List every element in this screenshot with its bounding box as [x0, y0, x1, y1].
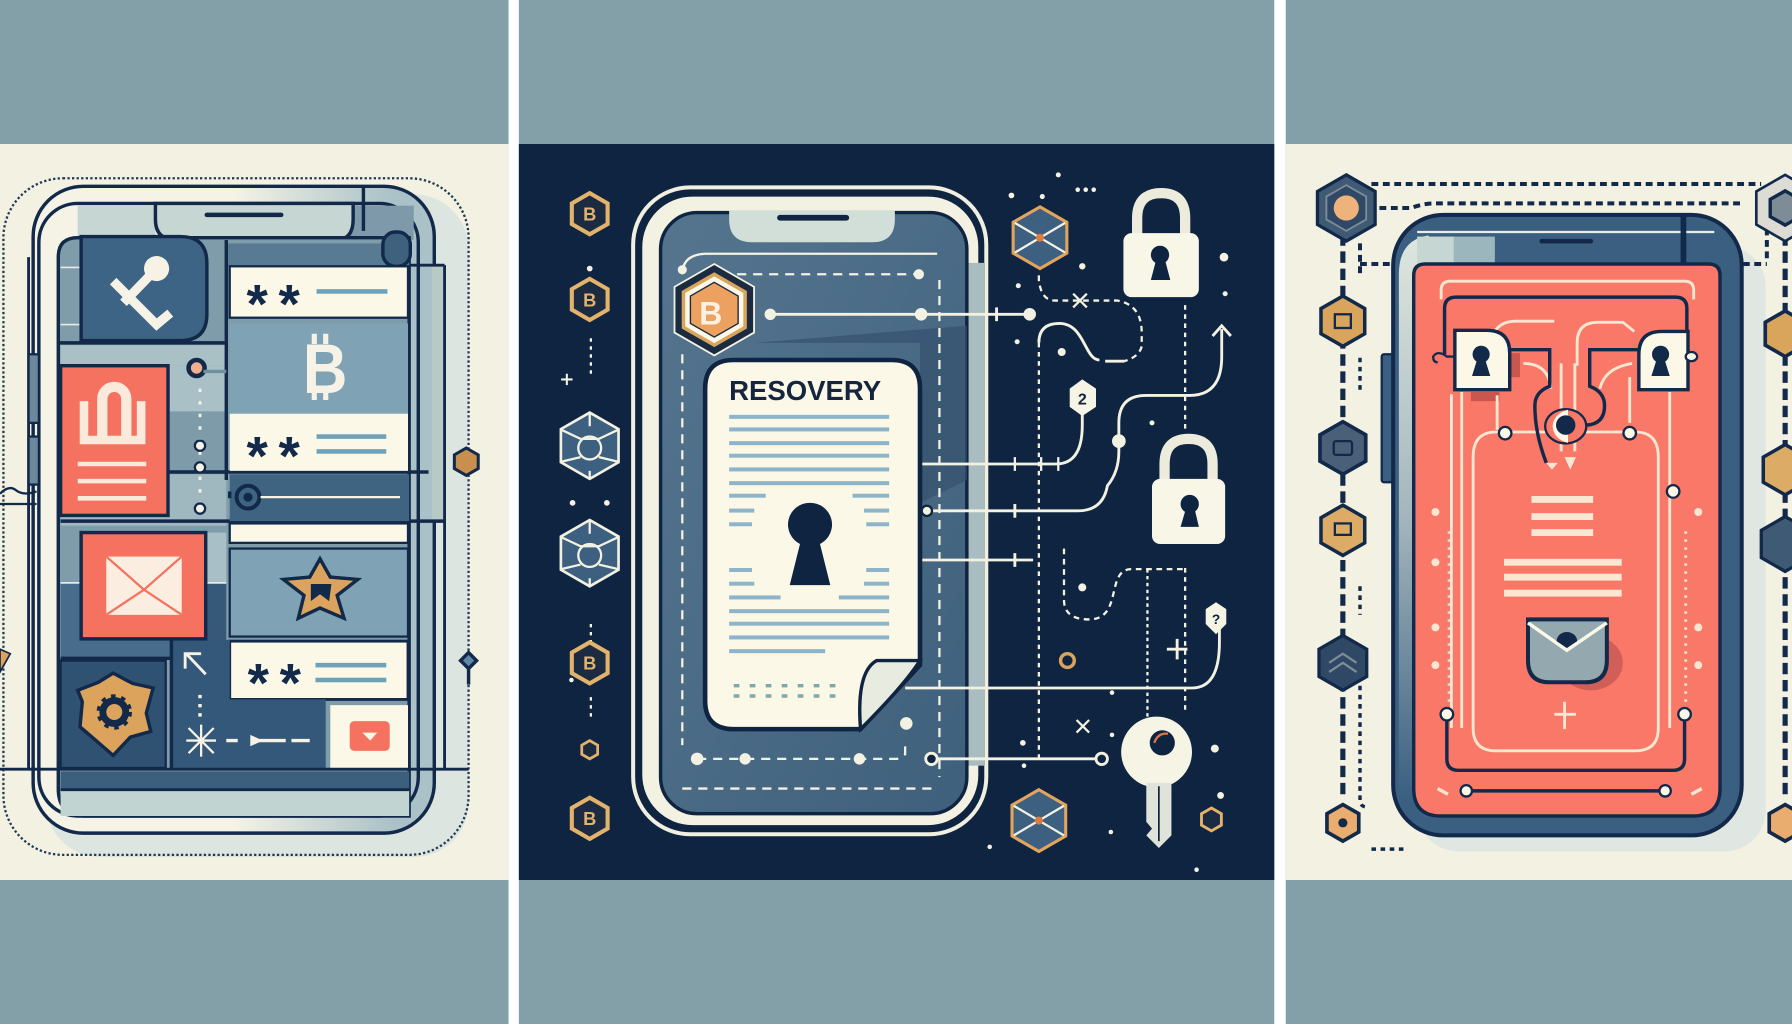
left column: gold hexagons: B — [583, 808, 596, 829]
lock: middle — [1152, 439, 1225, 544]
bottom home bar — [0, 769, 469, 790]
small numbered pins: ? — [1212, 612, 1220, 627]
node dots — [765, 308, 1126, 765]
lock: top — [1123, 193, 1199, 297]
dotted outline — [3, 178, 469, 855]
connector lines — [770, 307, 1231, 759]
cream strip — [230, 523, 408, 543]
envelope tile — [81, 533, 206, 639]
left column: gold hexagons: B — [583, 653, 596, 674]
coral screen — [1414, 264, 1720, 816]
phone body — [633, 187, 986, 834]
wires and side nodes — [0, 448, 478, 685]
star tile — [230, 549, 408, 637]
panel: centre phone with recovery document — [519, 144, 1274, 880]
gold B hexagon — [675, 264, 754, 355]
document text lines — [729, 415, 889, 653]
left lock — [1433, 330, 1510, 390]
right lock — [1639, 331, 1697, 390]
small numbered pins — [1070, 379, 1226, 634]
dashed screen path — [679, 254, 939, 789]
password row — [230, 414, 408, 486]
dashed network paths — [1039, 275, 1187, 759]
password row: * — [278, 424, 300, 486]
panel: left phone with recovery options — [0, 144, 509, 880]
dotted footer — [734, 686, 842, 696]
keyhole — [788, 503, 832, 585]
phone body — [29, 185, 445, 833]
side dots — [1431, 508, 1702, 794]
recovery document — [705, 360, 920, 729]
arrow and symbols tile — [171, 640, 326, 768]
right hexagon chain — [1756, 175, 1792, 841]
left column: gold hexagons: B — [583, 289, 596, 310]
password row: * — [246, 272, 268, 334]
panel: right phone with coral screen — [1286, 144, 1792, 880]
right cube hexagons — [1012, 207, 1074, 851]
gold B hexagon: B — [699, 296, 722, 332]
page curl — [860, 661, 920, 729]
envelope — [1528, 619, 1623, 690]
navy circuit — [1445, 297, 1687, 791]
left hexagon chain — [1317, 175, 1375, 841]
dashed top links — [1360, 184, 1767, 849]
white nodes — [1441, 427, 1691, 797]
phone shadow — [1417, 246, 1766, 851]
key — [1121, 717, 1192, 848]
password row: * — [280, 652, 302, 714]
text lines — [1504, 496, 1622, 597]
cream circuit lines — [1441, 281, 1694, 751]
scattered dots — [561, 172, 1228, 872]
screen — [58, 232, 445, 816]
phone body — [1382, 215, 1742, 835]
plus — [1554, 702, 1576, 729]
heading: RESOVERY — [729, 375, 881, 406]
password row: * — [248, 652, 270, 714]
password row: * — [246, 424, 268, 486]
password row — [230, 266, 408, 334]
bitcoin tile — [230, 323, 408, 414]
bitcoin tile: B — [303, 330, 347, 409]
key tile — [81, 237, 207, 341]
ring slider band — [230, 474, 409, 521]
coral document tile — [61, 366, 168, 515]
left column: cube hexagons — [561, 413, 619, 586]
left column: gold hexagons: B — [583, 204, 596, 225]
phone shadow — [46, 194, 469, 857]
password row: * — [278, 272, 300, 334]
centre eye node — [1545, 409, 1586, 470]
left column: gold hexagons — [572, 193, 1221, 839]
password row — [230, 641, 408, 714]
shield gear tile — [61, 661, 166, 768]
small alert card — [330, 705, 408, 768]
small numbered pins: 2 — [1078, 392, 1087, 409]
dotted connector nodes — [189, 360, 226, 514]
